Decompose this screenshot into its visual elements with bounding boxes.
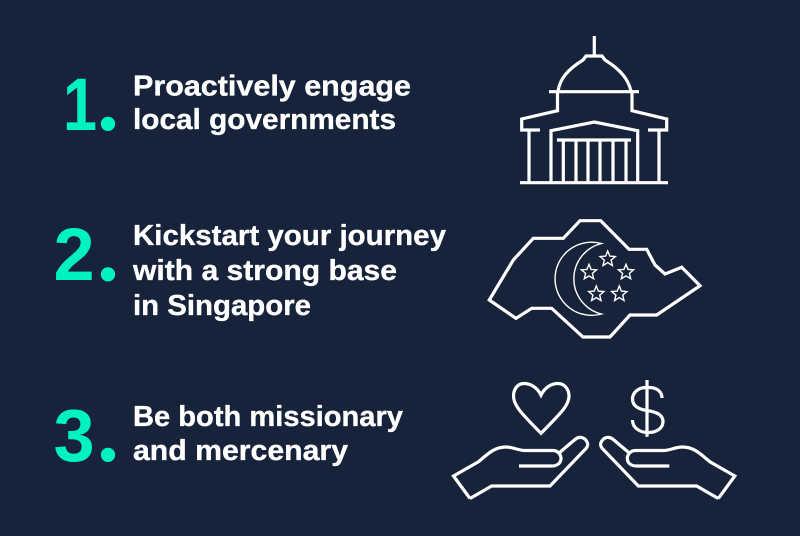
item 2: heading xyxy=(132,220,446,322)
icon: hands holding heart and dollar xyxy=(454,380,735,498)
item 2: heading: in Singapore xyxy=(133,290,311,322)
right hand xyxy=(601,437,735,498)
left hand xyxy=(454,437,588,498)
five stars xyxy=(581,251,634,300)
item 1: heading: local governments xyxy=(133,104,396,136)
item 2: number xyxy=(54,204,119,300)
item 2: heading: Kickstart your journey xyxy=(133,220,446,252)
icon: government building xyxy=(520,36,668,183)
item 3: heading: Be both missionary xyxy=(133,401,403,433)
item 1: number: . xyxy=(97,53,119,150)
item 1: heading: Proactively engage xyxy=(133,70,411,102)
item 2: heading: with a strong base xyxy=(132,255,397,287)
item 3: heading: and mercenary xyxy=(133,435,348,467)
heart xyxy=(514,384,569,433)
item 2: number: . xyxy=(97,204,119,300)
icon: Singapore map with crescent and stars xyxy=(489,221,700,337)
item 2: number: 2 xyxy=(54,213,95,296)
item 3: heading xyxy=(133,401,403,467)
item 3: number: . xyxy=(97,384,119,481)
map outline xyxy=(489,221,700,337)
item 1: heading xyxy=(133,70,411,136)
dollar sign xyxy=(632,380,663,437)
item 3: number xyxy=(54,384,119,481)
item 3: number: 3 xyxy=(54,394,95,477)
crescent moon xyxy=(555,242,602,315)
item 1: number: 1 xyxy=(63,63,97,146)
item 1: number xyxy=(63,53,119,150)
